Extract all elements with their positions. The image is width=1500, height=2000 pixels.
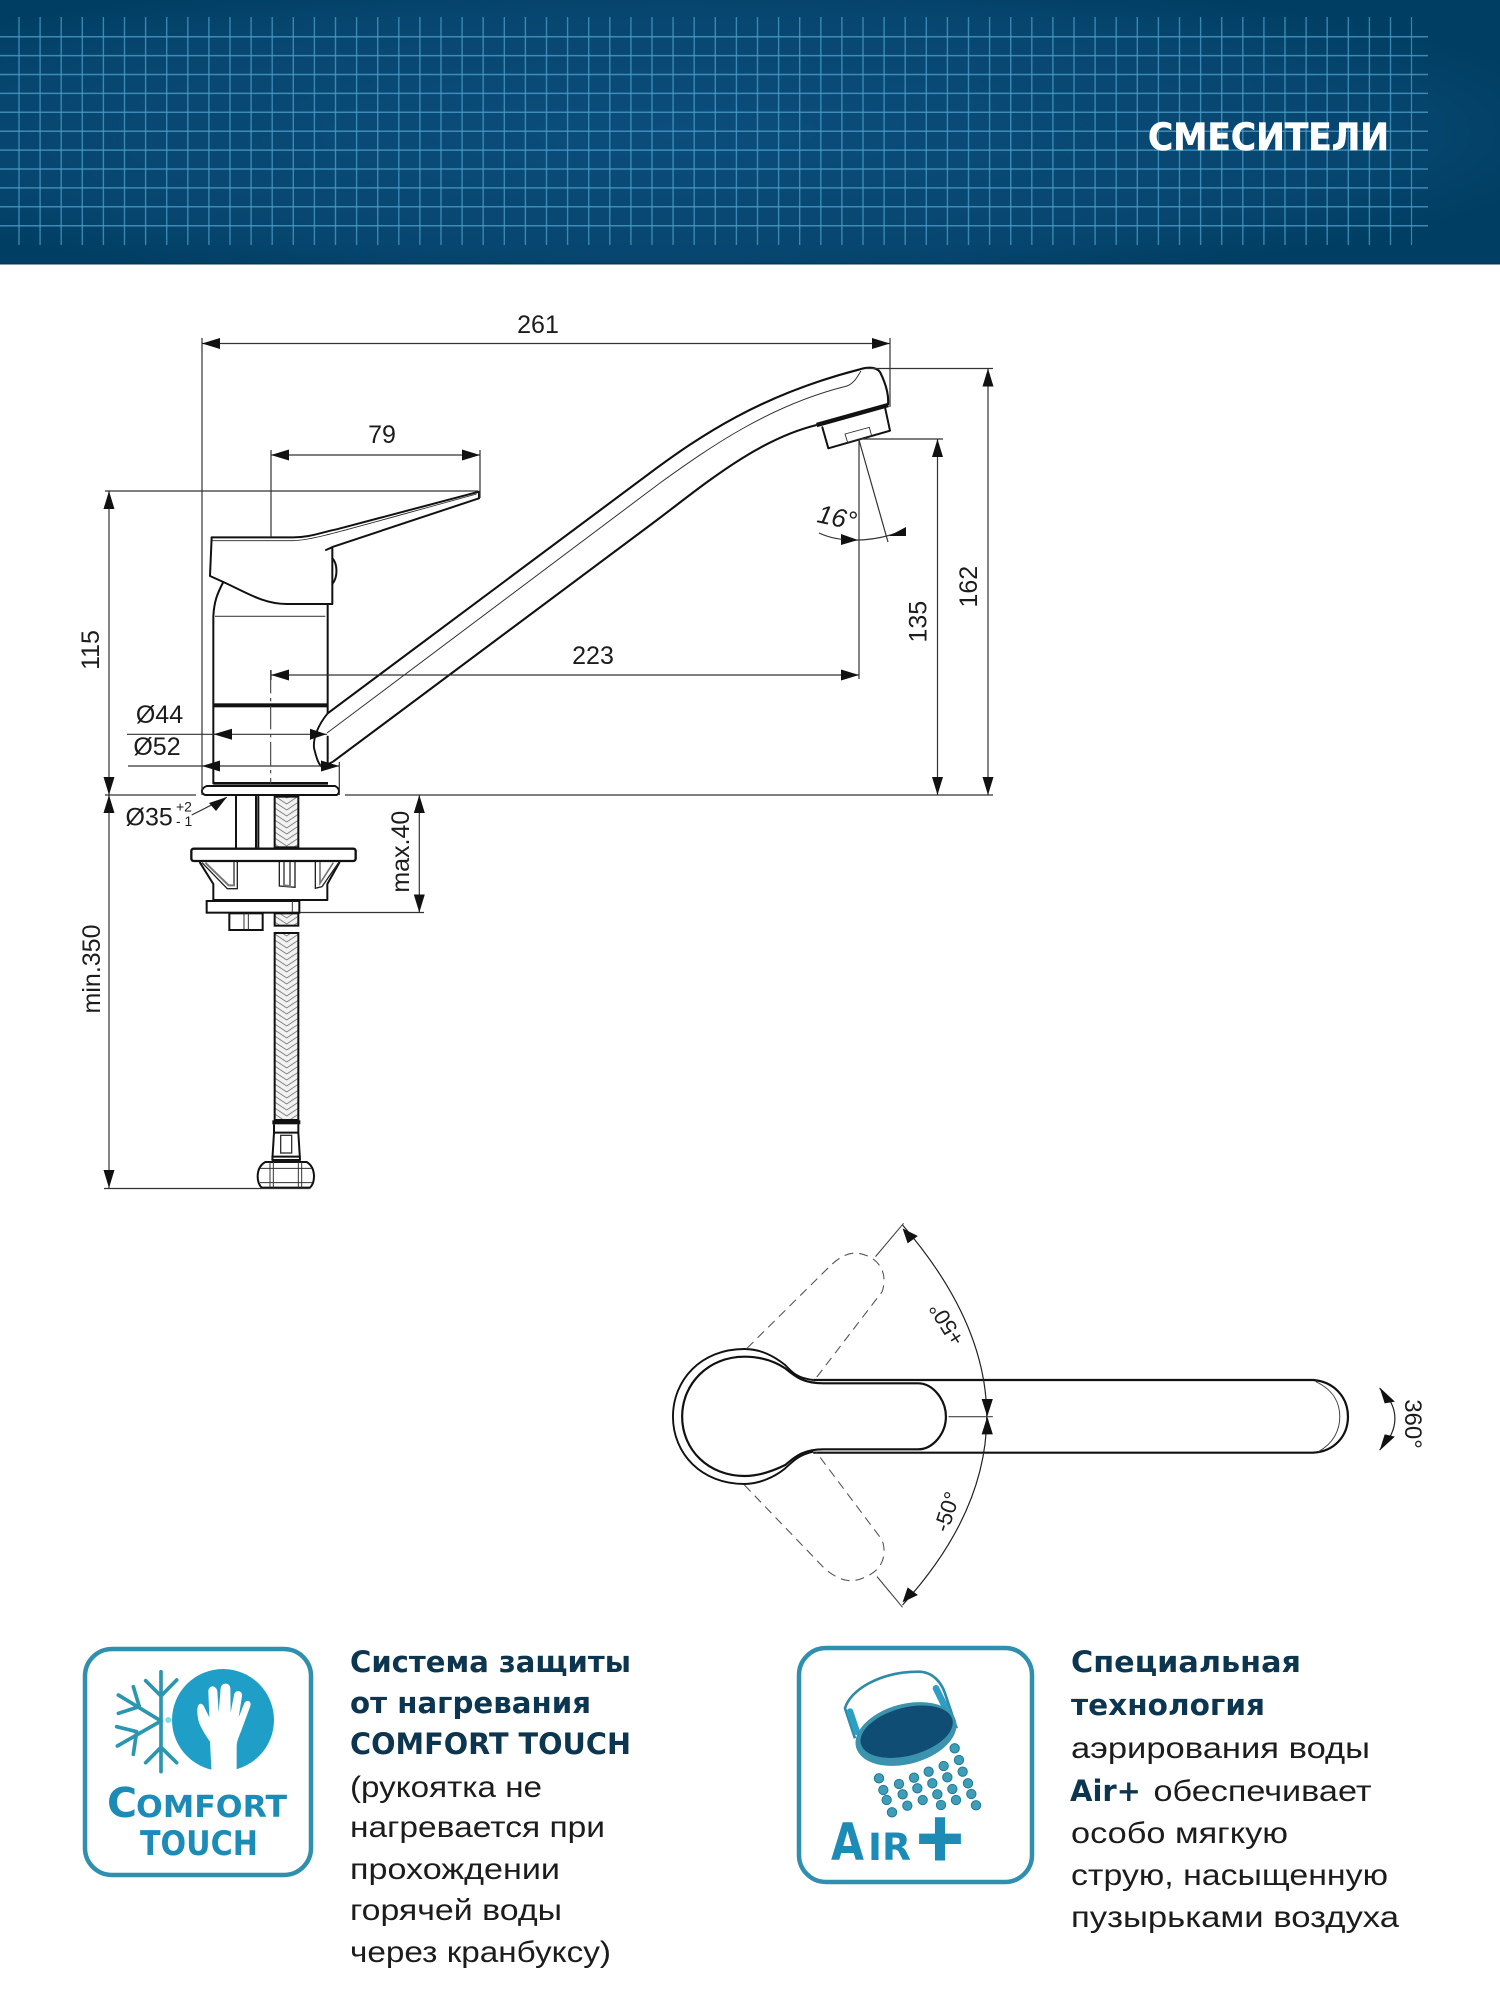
- text block: Air+ description: Специальная: [1071, 1645, 1301, 1679]
- text block: Comfort Touch description: от нагревания: [350, 1686, 591, 1720]
- text block: Comfort Touch description: нагревается при: [350, 1811, 605, 1844]
- hand in circle: [165, 1669, 274, 1775]
- dimension: min.350: min.350: [78, 925, 106, 1013]
- dimension: diameter 52: [128, 733, 339, 795]
- icon: Comfort Touch badge: [85, 1649, 311, 1875]
- icon: Air+ badge: +: [914, 1801, 966, 1875]
- icon: Air+ badge: IR: [868, 1826, 911, 1869]
- dimension: diameter 35 hole: Ø35: [126, 804, 173, 832]
- text block: Air+ description: особо мягкую: [1071, 1817, 1288, 1850]
- mounting hardware and hoses: [191, 797, 356, 1188]
- dimension: 115: [77, 491, 478, 795]
- dimension: min.350: [78, 795, 310, 1188]
- dimension: 162: 162: [955, 566, 983, 608]
- text block: Air+ description: пузырьками воздуха: [1071, 1901, 1399, 1934]
- faucet body and lever: [202, 492, 479, 795]
- header title: СМЕСИТЕЛИ: [1148, 116, 1389, 159]
- text block: Comfort Touch description: прохождении: [350, 1853, 560, 1886]
- faucet side-view technical drawing: [77, 311, 994, 1188]
- dimension: diameter 35 hole: - 1: [176, 813, 193, 829]
- header banner: [0, 0, 1500, 264]
- dimension: 79: 79: [368, 421, 396, 449]
- label: 360 degrees: 360°: [1399, 1399, 1426, 1449]
- icon: Air+ badge: [799, 1648, 1032, 1882]
- dimension: diameter 44: Ø44: [136, 701, 183, 729]
- dimension: 115: 115: [77, 630, 105, 670]
- label: -50 degrees: -50°: [929, 1489, 965, 1535]
- panel: Comfort Touch: [85, 1645, 631, 1969]
- dimension: 16 degree spray angle: [815, 440, 906, 545]
- text block: Air+ description: обеспечивает: [1154, 1775, 1372, 1808]
- faucet top-view drawing with rotation angles: [673, 1223, 1426, 1607]
- text block: Comfort Touch description: Система защиты: [350, 1645, 631, 1679]
- rotation arc with arrows: [876, 1223, 993, 1607]
- dimension: 135: 135: [905, 601, 933, 643]
- text block: Comfort Touch description: горячей воды: [350, 1894, 562, 1927]
- text block: Comfort Touch description: [350, 1645, 631, 1969]
- dimension: 79: [271, 421, 480, 537]
- label: +50 degrees: +50°: [924, 1298, 969, 1350]
- icon: Comfort Touch badge: OMFORT: [136, 1790, 288, 1825]
- dimension: 223: 223: [572, 642, 614, 670]
- dimension: 135: [860, 439, 943, 795]
- dimension: 16 degree spray angle: 16°: [815, 499, 859, 536]
- dimension: diameter 44: [127, 701, 327, 740]
- aerator and water drops: [845, 1672, 981, 1817]
- aerator: [817, 405, 890, 448]
- panel: Air+: [799, 1645, 1399, 1934]
- dimension: 162: [345, 368, 994, 795]
- dimension: diameter 35 hole: [126, 797, 227, 832]
- spout: [314, 368, 890, 767]
- text block: Comfort Touch description: COMFORT TOUCH: [350, 1727, 631, 1761]
- text block: Air+ description: струю, насыщенную: [1071, 1859, 1388, 1892]
- handle and spout outline: [673, 1223, 1395, 1607]
- dimension: diameter 35 hole: +2: [176, 798, 192, 814]
- icon: Comfort Touch badge: C: [107, 1779, 137, 1827]
- text block: Comfort Touch description: через кранбуксу): [350, 1936, 611, 1969]
- icon: Comfort Touch badge: TOUCH: [140, 1824, 258, 1864]
- dimension: max.40: max.40: [387, 811, 415, 893]
- snowflake: [117, 1672, 177, 1772]
- text block: Comfort Touch description: (рукоятка не: [350, 1771, 542, 1804]
- swivel arrow: [1380, 1387, 1395, 1451]
- text block: Air+ description: [1070, 1645, 1399, 1934]
- text block: Air+ description: технология: [1071, 1688, 1265, 1722]
- dimension: 261: [202, 311, 890, 795]
- dimension: diameter 52: Ø52: [133, 733, 181, 761]
- dashed handle positions: [744, 1253, 884, 1581]
- dimension: 223: [271, 440, 859, 680]
- dimension: max.40: [300, 795, 425, 912]
- text block: Air+ description: Air+: [1070, 1774, 1141, 1808]
- icon: Air+ badge: A: [831, 1813, 864, 1873]
- dimension: 261: 261: [517, 311, 559, 339]
- text block: Air+ description: аэрирования воды: [1071, 1732, 1370, 1765]
